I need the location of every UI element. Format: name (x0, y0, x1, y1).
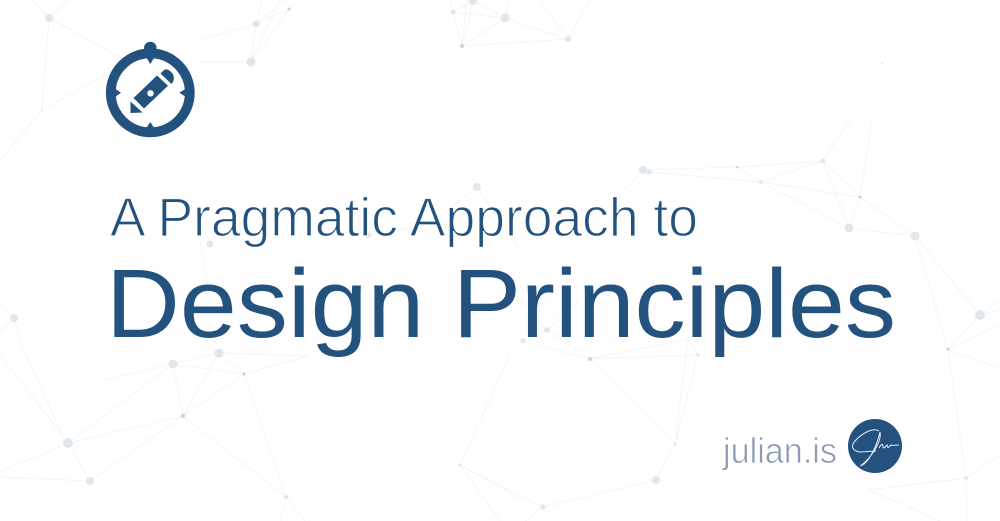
site name: julian.is (722, 430, 837, 471)
subtitle: A Pragmatic Approach to (110, 186, 698, 248)
title: Design Principles (106, 249, 896, 358)
logo: signature badge (848, 419, 902, 473)
icon: compass with pencil (111, 42, 190, 132)
